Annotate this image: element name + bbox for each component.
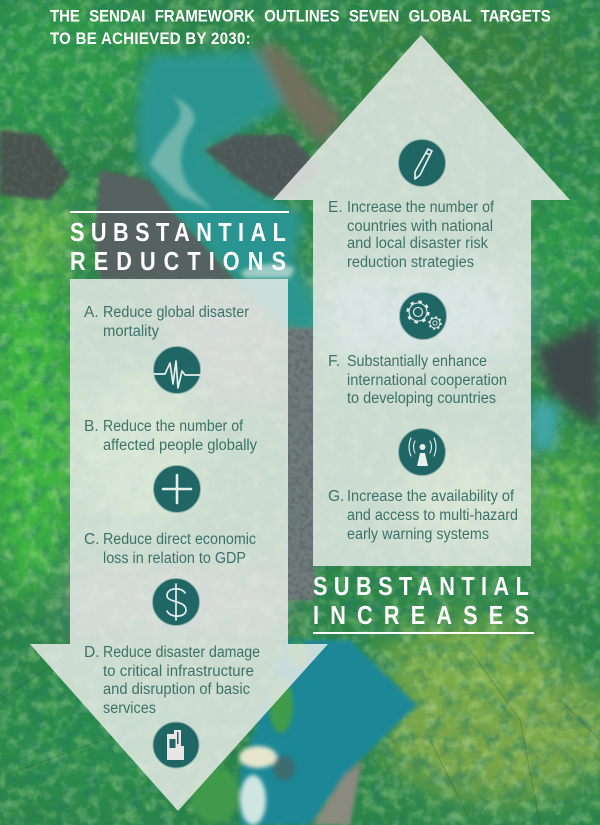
target D text: Reduce disaster damage <box>103 644 260 661</box>
target C text: loss in relation to GDP <box>103 550 246 567</box>
target D text: services <box>103 700 156 717</box>
target B text: Reduce the number of <box>103 418 244 435</box>
target F text <box>328 353 507 407</box>
target G text: early warning systems <box>347 526 489 543</box>
target C text <box>84 531 256 567</box>
target F text: to developing countries <box>347 390 496 407</box>
heading: substantial reductions <box>70 211 289 276</box>
target C text: Reduce direct economic <box>103 531 256 548</box>
target G text: Increase the availability of <box>347 488 515 505</box>
icon: warning signal antenna <box>398 428 446 476</box>
target D text <box>84 644 260 717</box>
target F text: international cooperation <box>347 372 507 389</box>
target G text: G. <box>328 488 344 505</box>
title <box>50 8 551 48</box>
target B text: affected people globally <box>103 437 257 454</box>
heading: substantial increases <box>313 573 534 634</box>
icon: dollar sign <box>152 578 200 626</box>
target E text: Increase the number of <box>347 199 495 216</box>
heading: substantial reductions: REDUCTIONS <box>70 248 286 276</box>
target E text: countries with national <box>347 218 493 235</box>
target F text: F. <box>328 353 340 370</box>
heading: substantial increases: INCREASES <box>313 602 529 630</box>
icon: gears <box>400 292 446 340</box>
target G text: and access to multi-hazard <box>347 507 518 524</box>
target G text <box>328 488 518 543</box>
target A text: mortality <box>103 323 159 340</box>
target D text: to critical infrastructure <box>103 663 254 680</box>
target A text <box>84 304 249 340</box>
target A text: A. <box>84 304 99 321</box>
target E text: reduction strategies <box>347 254 474 271</box>
target B text <box>84 418 257 454</box>
target D text: and disruption of basic <box>103 681 250 698</box>
arrow: substantial reductions (down) <box>30 279 328 811</box>
target E text <box>328 199 495 271</box>
title: TO BE ACHIEVED BY 2030: <box>50 30 251 48</box>
target E text: E. <box>328 199 343 216</box>
target B text: B. <box>84 418 99 435</box>
target F text: Substantially enhance <box>347 353 487 370</box>
icon: plus <box>154 466 200 512</box>
heading: substantial reductions: SUBSTANTIAL <box>70 219 286 247</box>
arrow: substantial increases (up) <box>273 35 570 566</box>
icon: buildings <box>153 722 199 768</box>
icon: heartbeat pulse <box>154 346 200 394</box>
target E text: and local disaster risk <box>347 235 488 252</box>
target C text: C. <box>84 531 100 548</box>
target A text: Reduce global disaster <box>103 304 249 321</box>
title: THE SENDAI FRAMEWORK OUTLINES SEVEN GLOBAL TARGETS <box>50 8 551 26</box>
icon: pencil <box>398 140 446 186</box>
heading: substantial increases: SUBSTANTIAL <box>313 573 529 601</box>
target D text: D. <box>84 644 100 661</box>
